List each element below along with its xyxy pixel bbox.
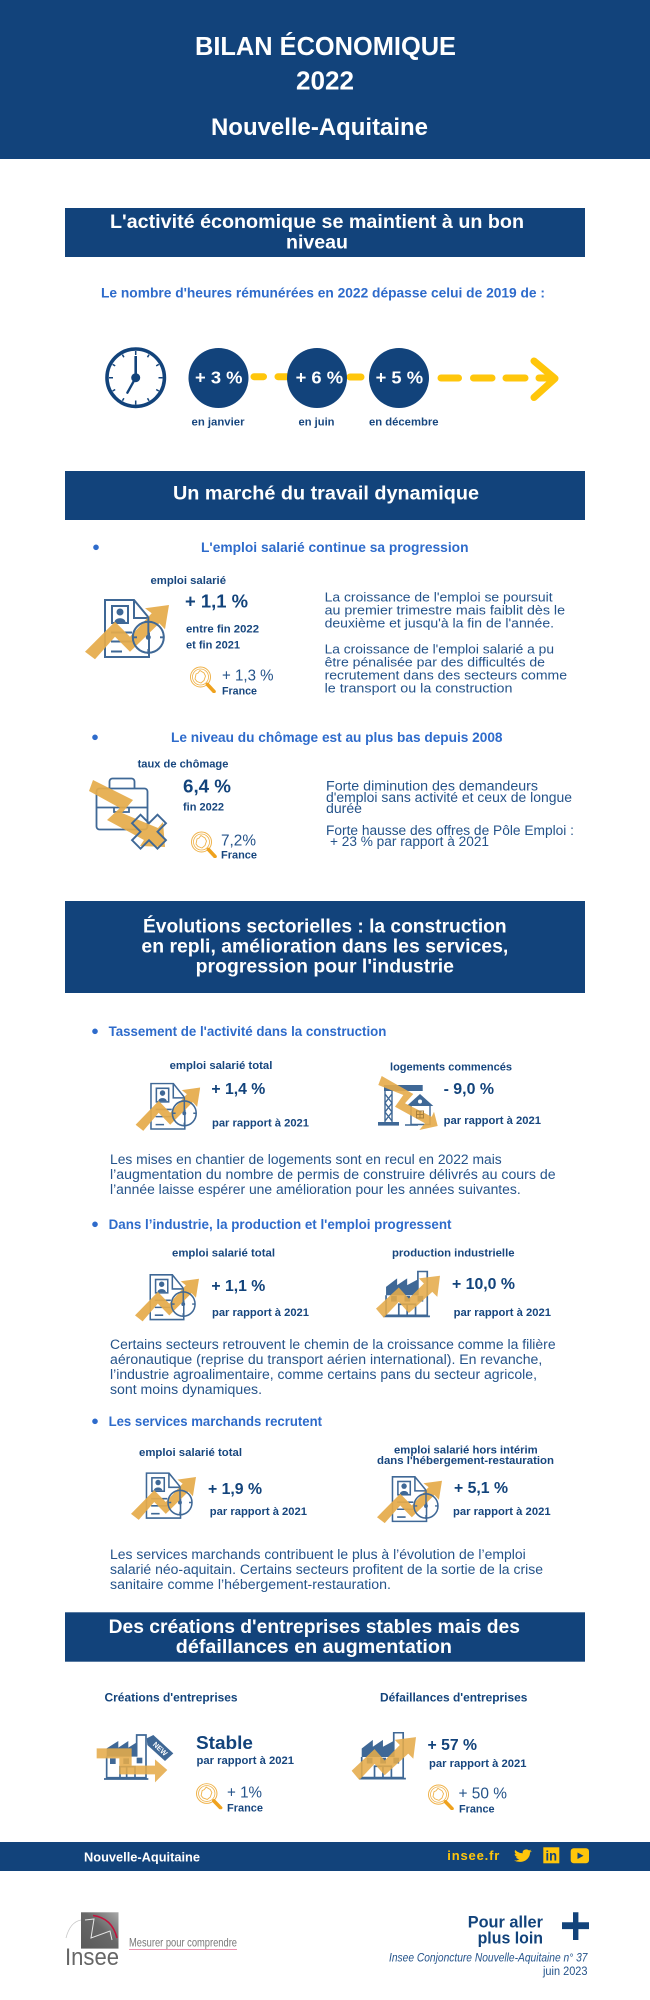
stat: december <box>369 348 438 429</box>
title: BILAN ÉCONOMIQUE <box>195 31 456 61</box>
callout: further reading: juin 2023 <box>542 1966 588 1978</box>
icon: youtube <box>571 1848 589 1863</box>
panel: employment stat: France <box>222 686 257 698</box>
icon: crane and house <box>378 1076 438 1130</box>
stat: construction employment: par rapport à 2021 <box>212 1118 309 1130</box>
stat: december: en décembre <box>369 417 438 429</box>
callout: further reading: Pour aller <box>468 1913 544 1931</box>
icon: new factory <box>97 1735 173 1782</box>
icon: employment growth <box>377 1477 442 1523</box>
panel: unemployment stat: taux de chômage <box>138 759 228 771</box>
stat: hospitality employment: emploi salarié hors intérim <box>394 1445 538 1457</box>
stat: industrial production <box>376 1248 551 1319</box>
callout: further reading: plus loin <box>478 1929 543 1947</box>
icon: France magnifier <box>428 1785 452 1809</box>
stat: construction employment <box>136 1060 309 1131</box>
stat: june: en juin <box>298 417 335 429</box>
arrow: dashed yellow progression <box>254 361 555 398</box>
text block: unemployment commentary: Forte diminution des demandeurs <box>326 779 538 794</box>
panel: business heading: défaillances en augmentation <box>176 1637 452 1658</box>
stat: january: en janvier <box>192 417 245 429</box>
text block: employment commentary: le transport ou la construction <box>325 681 512 696</box>
panel: unemployment stat: 7,2% <box>221 832 256 849</box>
text block: employment commentary: La croissance de l'emploi salarié a pu <box>325 642 554 657</box>
paid hours statement: Le nombre d'heures rémunérées en 2022 dépasse celui de 2019 de : <box>101 286 545 301</box>
stat: services employment: par rapport à 2021 <box>210 1506 307 1518</box>
text block: services commentary: sanitaire comme l’hébergement-restauration. <box>110 1577 391 1592</box>
stat: business failures <box>352 1691 528 1816</box>
icon: linkedin <box>543 1847 559 1864</box>
panel: unemployment stat <box>89 759 257 862</box>
stat: industry employment: par rapport à 2021 <box>212 1307 309 1319</box>
stat: business creations: + 1% <box>227 1785 262 1802</box>
subheading: services: Les services marchands recrutent <box>109 1414 322 1429</box>
panel: sector heading: Évolutions sectorielles : la construction <box>143 916 507 938</box>
text block: unemployment commentary: d'emploi sans activité et ceux de longue <box>326 790 572 805</box>
stat: business failures: + 50 % <box>458 1786 507 1803</box>
logo: Insee: Mesurer pour comprendre <box>129 1936 237 1950</box>
stat: business failures: + 57 % <box>428 1737 477 1754</box>
stat: january <box>188 348 248 429</box>
stat: housing starts: - 9,0 % <box>444 1081 494 1098</box>
stat: business failures: par rapport à 2021 <box>429 1758 526 1770</box>
panel: labour market heading: Un marché du travail dynamique <box>173 483 479 504</box>
stat: industrial production: par rapport à 2021 <box>454 1307 551 1319</box>
panel: employment stat: + 1,1 % <box>185 591 248 612</box>
panel: business heading <box>65 1612 585 1662</box>
footer band: Nouvelle-Aquitaine <box>84 1851 200 1865</box>
subheading: employment <box>93 540 468 555</box>
panel: unemployment stat: 6,4 % <box>183 776 231 797</box>
footer band: insee.fr <box>447 1848 499 1863</box>
text block: employment commentary: recrutement dans des secteurs comme <box>325 668 567 683</box>
header banner <box>0 0 650 159</box>
text block: unemployment commentary <box>326 779 574 849</box>
panel: employment stat: + 1,3 % <box>222 668 274 685</box>
stat: hospitality employment: par rapport à 2021 <box>453 1506 551 1518</box>
callout: further reading <box>389 1912 589 1978</box>
panel: employment stat: emploi salarié <box>150 575 226 587</box>
text block: construction commentary <box>110 1152 556 1197</box>
logo: Insee <box>65 1912 237 1971</box>
stat: june: + 6 % <box>296 368 344 388</box>
title <box>195 31 456 95</box>
icon: plus <box>562 1912 589 1940</box>
icon: factory growth <box>376 1271 440 1318</box>
stat: december: + 5 % <box>376 368 424 388</box>
region subtitle: Nouvelle-Aquitaine <box>211 114 428 141</box>
icon: France magnifier <box>197 1784 221 1808</box>
icon: employment growth <box>136 1083 200 1131</box>
subheading: unemployment: Le niveau du chômage est au plus bas depuis 2008 <box>171 730 503 745</box>
stat: housing starts: logements commencés <box>390 1062 512 1074</box>
text block: industry commentary: Certains secteurs retrouvent le chemin de la croissance comme la filière <box>110 1337 556 1352</box>
icon: twitter <box>514 1849 532 1862</box>
text block: unemployment commentary: Forte hausse des offres de Pôle Emploi : <box>326 823 574 838</box>
stat: hospitality employment: + 5,1 % <box>454 1480 508 1497</box>
icon: briefcase with falling arrow <box>89 778 174 857</box>
text block: industry commentary <box>110 1337 556 1397</box>
icon: employment growth <box>135 1275 199 1321</box>
icon: new factory: NEW <box>151 1740 169 1758</box>
stat: industrial production: production industrielle <box>392 1248 514 1260</box>
text block: employment commentary: deuxième et jusqu'à la fin de l'année. <box>325 616 554 631</box>
panel: sector heading: progression pour l'industrie <box>196 957 454 978</box>
panel: labour market heading <box>65 471 585 520</box>
stat: business creations: France <box>227 1803 263 1815</box>
panel: unemployment stat: France <box>221 850 257 862</box>
subheading: employment: L'emploi salarié continue sa progression <box>201 540 468 555</box>
text block: industry commentary: aéronautique (reprise du transport aérien international). En revanche, <box>110 1352 542 1367</box>
stat: june <box>287 348 347 429</box>
stat: industry employment: + 1,1 % <box>211 1278 265 1295</box>
panel: activity heading: niveau <box>286 232 348 253</box>
text block: employment commentary <box>325 590 567 696</box>
text block: unemployment commentary: + 23 % par rapport à 2021 <box>330 834 489 849</box>
stat: industry employment: emploi salarié total <box>172 1248 275 1260</box>
panel: activity heading: L'activité économique se maintient à un bon <box>110 212 524 233</box>
text block: services commentary <box>110 1547 543 1592</box>
stat: business creations: Stable <box>196 1732 253 1753</box>
stat: industrial production: + 10,0 % <box>452 1276 515 1293</box>
stat: housing starts: par rapport à 2021 <box>444 1115 541 1127</box>
panel: employment stat <box>85 575 274 698</box>
stat: hospitality employment <box>377 1445 554 1523</box>
stat: construction employment: emploi salarié total <box>170 1060 272 1072</box>
stat: housing starts <box>378 1062 541 1130</box>
logo: Insee: Insee <box>65 1944 119 1971</box>
icon: factory growth <box>352 1733 416 1780</box>
text block: services commentary: salarié néo-aquitain. Certains secteurs profitent de la sortie de la crise <box>110 1562 543 1577</box>
icon: France magnifier <box>190 667 214 692</box>
stat: business failures: France <box>459 1804 495 1816</box>
footer band <box>0 1842 650 1871</box>
text block: unemployment commentary: durée <box>326 801 362 816</box>
text block: employment commentary: La croissance de l'emploi se poursuit <box>325 590 553 605</box>
text block: construction commentary: l’année laisse espérer une amélioration pour les années suivantes. <box>110 1182 521 1197</box>
stat: services employment: + 1,9 % <box>208 1481 262 1498</box>
panel: sector heading <box>65 901 585 993</box>
text block: employment commentary: être pénalisée par des difficultés de <box>325 655 545 670</box>
stat: january: + 3 % <box>195 368 243 388</box>
stat: business failures: Défaillances d'entreprises <box>380 1691 528 1705</box>
panel: unemployment stat: fin 2022 <box>183 802 224 814</box>
stat: business creations: par rapport à 2021 <box>196 1755 294 1767</box>
panel: business heading: Des créations d'entreprises stables mais des <box>109 1617 520 1638</box>
icon: linkedin: in <box>546 1848 557 1864</box>
icon: employment growth <box>85 600 169 659</box>
panel: activity heading <box>65 208 585 257</box>
icon: clock <box>107 349 164 406</box>
stat: business creations: Créations d'entreprises <box>104 1691 238 1705</box>
title: 2022 <box>296 65 354 95</box>
stat: services employment: emploi salarié total <box>139 1447 242 1459</box>
panel: employment stat: entre fin 2022 <box>186 624 259 636</box>
icon: employment growth <box>131 1473 196 1520</box>
text block: construction commentary: l’augmentation du nombre de permis de construire délivrés au cours de <box>110 1167 556 1182</box>
text block: construction commentary: Les mises en chantier de logements sont en recul en 2022 mais <box>110 1152 502 1167</box>
icon: France magnifier <box>192 832 215 856</box>
text block: industry commentary: sont moins dynamiques. <box>110 1382 262 1397</box>
callout: further reading: Insee Conjoncture Nouvelle-Aquitaine n° 37 <box>389 1953 588 1965</box>
panel: sector heading: en repli, amélioration dans les services, <box>141 937 508 958</box>
text block: services commentary: Les services marchands contribuent le plus à l’évolution de l’emploi <box>110 1547 526 1562</box>
panel: employment stat: et fin 2021 <box>186 640 240 652</box>
stat: industry employment <box>135 1248 309 1321</box>
stat: business creations <box>97 1691 294 1815</box>
stat: services employment <box>131 1447 307 1520</box>
subheading: construction: Tassement de l'activité dans la construction <box>109 1024 386 1039</box>
subheading: industry: Dans l’industrie, la production et l'emploi progressent <box>109 1217 452 1232</box>
stat: hospitality employment: dans l'hébergement-restauration <box>377 1455 554 1467</box>
text block: employment commentary: au premier trimestre mais faiblit dès le <box>325 603 565 618</box>
stat: construction employment: + 1,4 % <box>211 1081 265 1098</box>
text block: industry commentary: l’industrie agroalimentaire, comme certains pans du secteur agricole, <box>110 1367 537 1382</box>
